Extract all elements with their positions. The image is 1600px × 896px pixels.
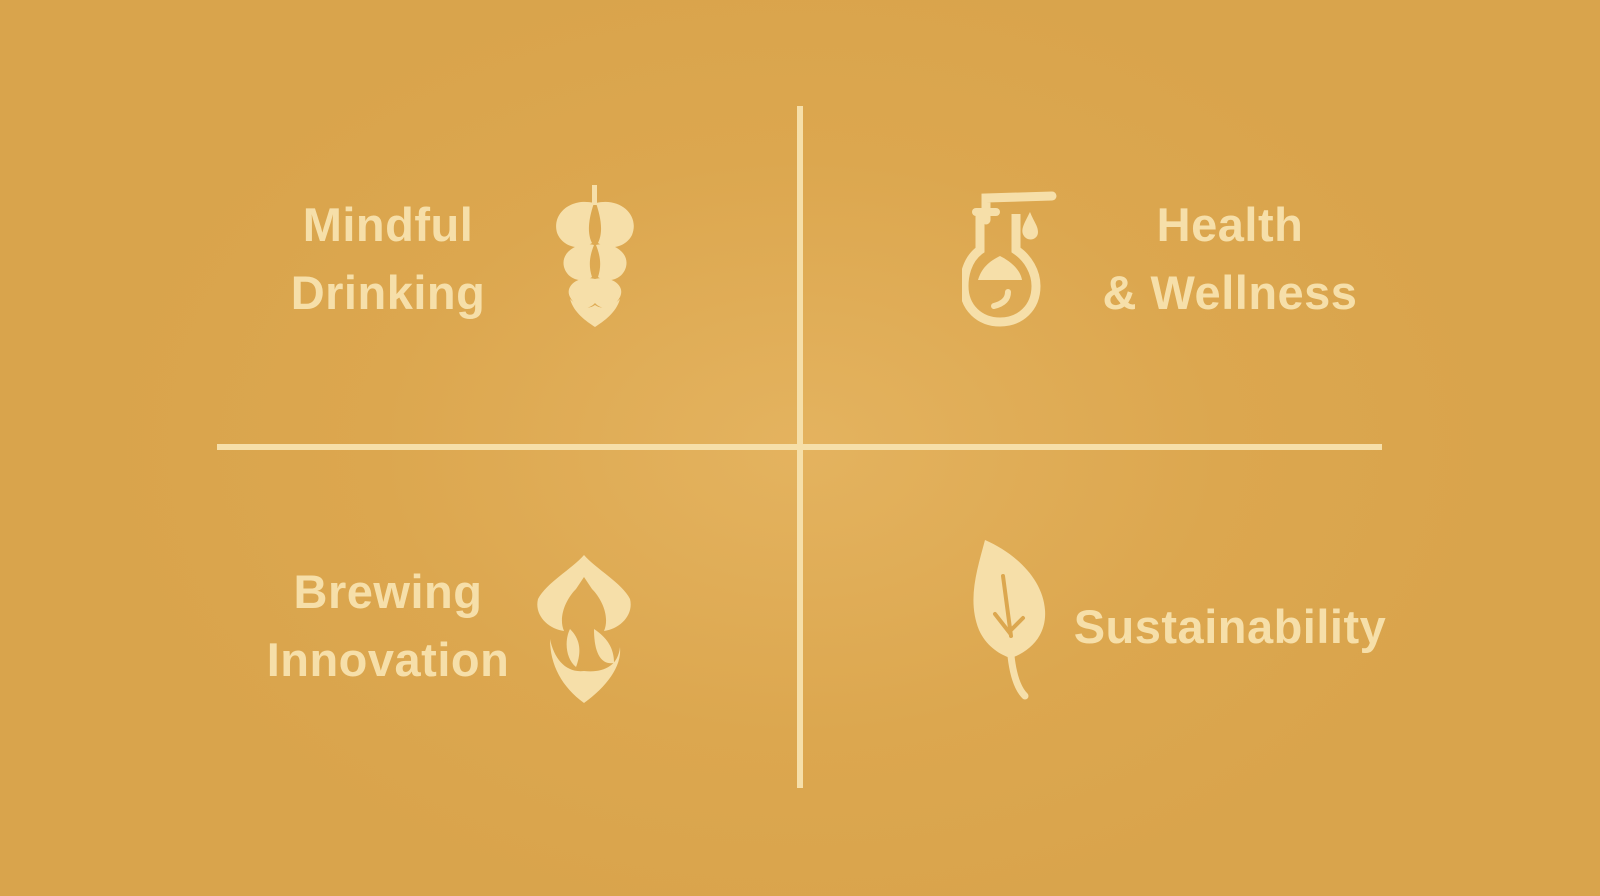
text: Mindful Drinking: Drinking xyxy=(291,266,485,319)
text: Mindful Drinking: Mindful xyxy=(303,198,473,251)
icon: flask xyxy=(962,192,1056,326)
text: Mindful Drinking xyxy=(291,198,485,319)
text: Health & Wellness xyxy=(1103,198,1357,319)
vertical divider xyxy=(797,106,803,788)
icon: hop with leaves xyxy=(537,555,631,703)
icon: leaf xyxy=(973,540,1046,700)
text: Brewing Innovation: Innovation xyxy=(267,633,509,686)
text: Health & Wellness: Health xyxy=(1157,198,1303,251)
horizontal divider xyxy=(217,444,1382,450)
icon: hop xyxy=(556,185,634,327)
text: Brewing Innovation: Brewing xyxy=(294,565,482,618)
text: Health & Wellness: & Wellness xyxy=(1103,266,1357,319)
text: Sustainability: Sustainability xyxy=(1074,600,1386,653)
text: Brewing Innovation xyxy=(267,565,509,686)
